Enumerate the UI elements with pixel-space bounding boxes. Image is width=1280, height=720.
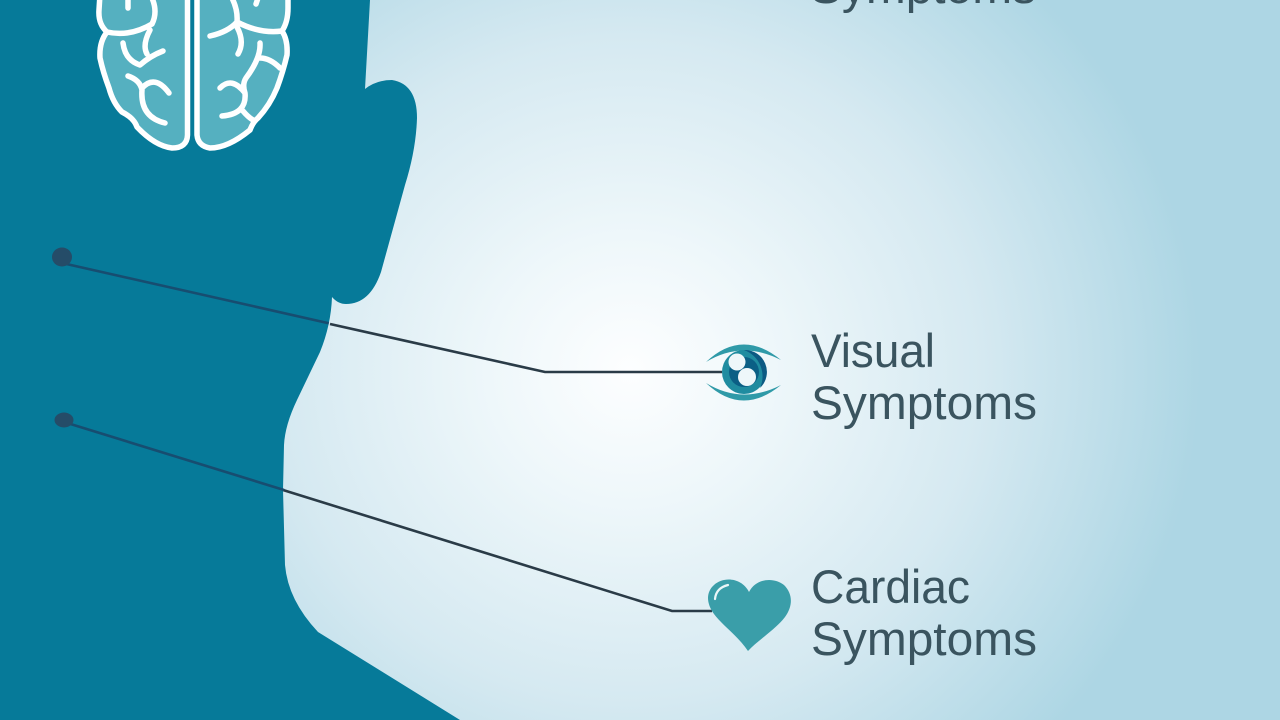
head silhouette [0,0,460,720]
left brain folds [107,0,169,123]
label: cardiac symptoms: Cardiac [811,560,970,613]
icon: eye [706,344,781,401]
right brain folds [210,0,282,120]
anchor dot [52,248,72,266]
label: cardiac symptoms: Symptoms [811,612,1037,665]
label: cardiac symptoms [811,560,1037,665]
anchor dot [54,412,74,428]
label: visual symptoms: Symptoms [811,376,1037,429]
label: visual symptoms [811,324,1037,429]
right hemisphere [197,0,288,148]
icon: brain [99,0,288,148]
leader line: visual symptoms [52,248,722,372]
left hemisphere [99,0,188,148]
label: visual symptoms: Visual [811,324,935,377]
icon: heart [708,580,791,651]
leader line: cardiac symptoms [54,412,712,611]
